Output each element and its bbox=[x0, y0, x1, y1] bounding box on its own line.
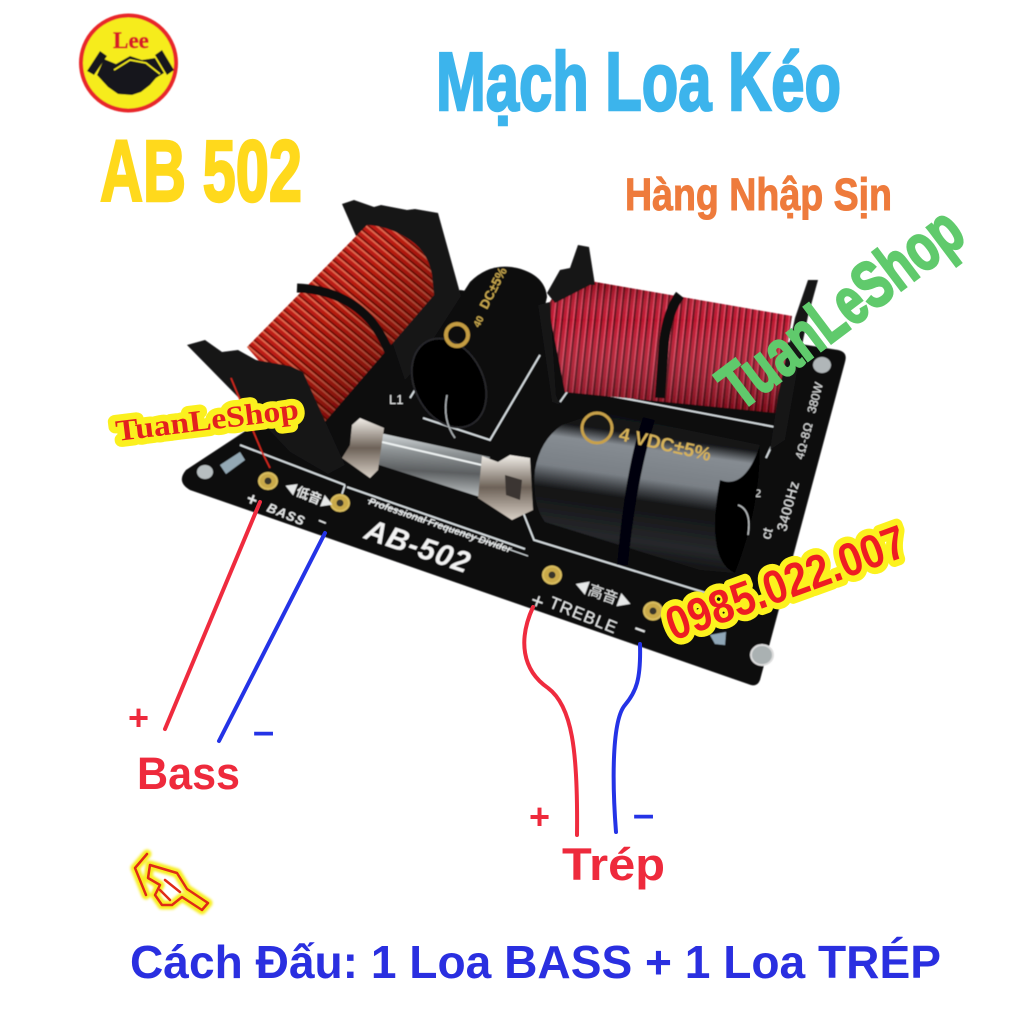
logo: Lee handshake badge bbox=[81, 16, 176, 110]
mount holes bbox=[197, 357, 831, 665]
board labels: 4Ω-8Ω bbox=[792, 421, 816, 461]
board labels: ct bbox=[757, 526, 776, 541]
right coil: red copper winding bbox=[548, 280, 792, 413]
left coil front bobbin bbox=[187, 340, 345, 474]
board labels: AB-502 bbox=[360, 513, 475, 580]
bass labels: – bbox=[253, 711, 274, 753]
back left coil bobbin bbox=[342, 200, 462, 380]
treble labels: + bbox=[529, 796, 550, 837]
bass labels: + bbox=[128, 697, 149, 738]
board labels: 380W bbox=[804, 380, 826, 415]
footer instruction: Cách Đấu: 1 Loa BASS + 1 Loa TRÉP bbox=[130, 936, 941, 988]
subtitle: Hàng Nhập Sịn: Hàng Nhập Sịn bbox=[625, 169, 892, 220]
board labels: Professional Frequency Divider bbox=[367, 496, 514, 556]
board labels bbox=[244, 380, 826, 642]
right coil bobbins bbox=[538, 245, 818, 450]
board labels: ◀高音▶ bbox=[572, 577, 634, 613]
treble labels: – bbox=[633, 794, 654, 836]
board labels: – bbox=[631, 617, 649, 642]
icon: pointing hand bbox=[135, 854, 208, 910]
bass wires bbox=[165, 502, 325, 741]
bass labels bbox=[128, 697, 274, 799]
bass labels: Bass bbox=[137, 748, 240, 799]
board labels: 2 bbox=[755, 488, 761, 500]
capacitor: small black bbox=[397, 264, 547, 440]
capacitor: large chrome bbox=[534, 412, 760, 573]
board labels: L1 bbox=[389, 392, 403, 407]
board labels: 3400Hz bbox=[773, 479, 802, 533]
heading: AB 502 model name: AB 502 bbox=[100, 123, 302, 220]
capacitor: large chrome: 4 VDC±5% bbox=[617, 424, 713, 466]
crossover board photo bbox=[182, 200, 846, 685]
logo: Lee handshake badge: Lee bbox=[113, 28, 149, 53]
treble labels bbox=[529, 794, 665, 890]
board labels: ◀低音▶ bbox=[282, 479, 336, 512]
board labels: BASS bbox=[265, 500, 308, 529]
capacitor: small black: 40 bbox=[472, 314, 487, 329]
glass fuse with clips bbox=[342, 418, 533, 520]
board labels: + bbox=[527, 587, 548, 615]
circuit board bbox=[182, 290, 846, 685]
sticker: TuanLeShop yellow: TuanLeShop bbox=[114, 393, 300, 448]
sticker: phone number: 0985.022.007 bbox=[658, 514, 913, 650]
board labels: + bbox=[244, 488, 261, 511]
thin red coil lead bbox=[231, 378, 270, 468]
capacitor: small black: DC±5% bbox=[476, 264, 510, 311]
gold solder pads bbox=[259, 473, 662, 620]
treble wires bbox=[524, 607, 640, 835]
board labels: – bbox=[316, 512, 330, 531]
title: Mạch Loa Kéo: Mạch Loa Kéo bbox=[436, 35, 841, 128]
treble labels: Trép bbox=[562, 839, 665, 890]
left coil: red copper winding bbox=[247, 225, 434, 424]
board labels: TREBLE bbox=[547, 593, 621, 638]
